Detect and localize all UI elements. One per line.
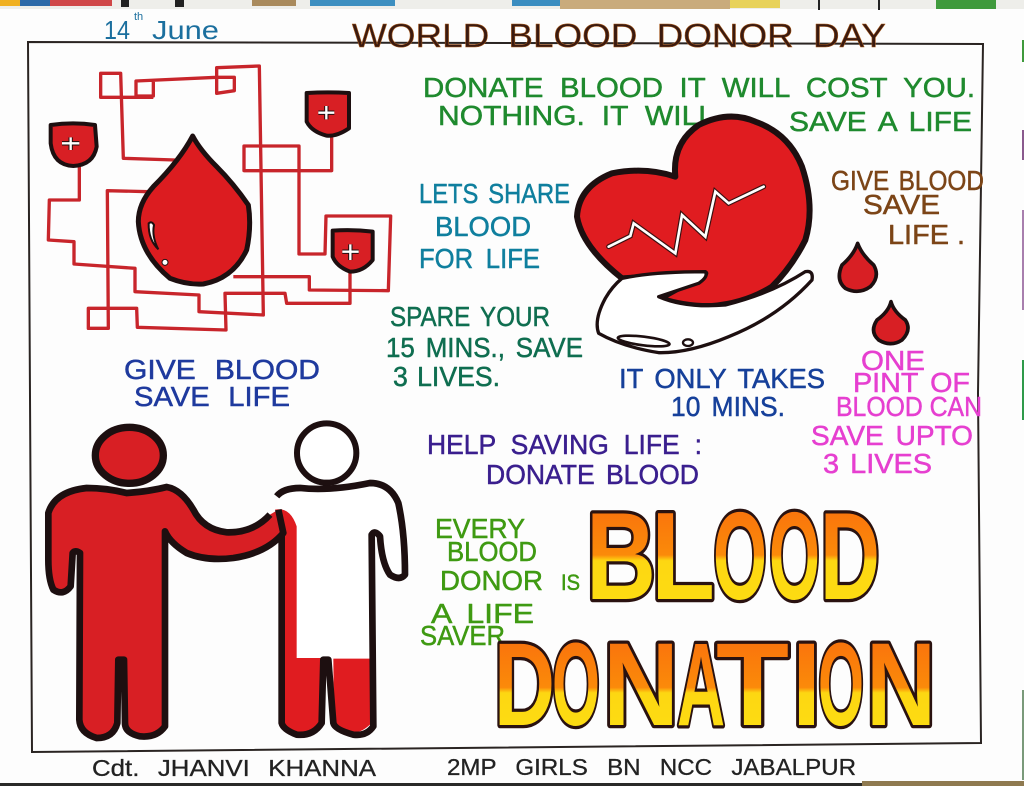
text: give blood save life (blue): SAVE LIFE	[134, 381, 290, 412]
text: donate blood slogan: NOTHING. IT WILL	[438, 100, 715, 131]
text: one pint of blood: PINT OF	[853, 367, 970, 398]
text: every blood donor is a life saver	[420, 513, 580, 651]
text: give blood save life (brown): LIFE .	[888, 219, 965, 250]
icon: blood bag lower right	[333, 230, 373, 272]
red tubes	[48, 66, 391, 330]
big heading: BLOOD: B	[586, 488, 656, 626]
text: every blood donor is a life saver: A LIFE	[431, 598, 534, 629]
title: WORLD BLOOD DONOR DAY	[352, 17, 886, 54]
big heading: DONATION: O	[552, 619, 600, 751]
text: spare your 15 mins: SPARE YOUR	[390, 301, 550, 332]
text: lets share blood for life: BLOOD	[435, 211, 531, 242]
text: every blood donor is a life saver: DONOR	[440, 565, 543, 596]
credits	[92, 754, 856, 781]
credits: 2MP GIRLS BN NCC JABALPUR	[447, 754, 856, 780]
icon: heart	[577, 117, 810, 306]
text: give blood save life (brown)	[831, 165, 984, 250]
text: one pint of blood: BLOOD CAN	[836, 391, 982, 422]
date: 14th June	[104, 11, 219, 45]
text: it only takes 10 mins	[619, 363, 825, 422]
big heading: BLOOD: D	[820, 488, 880, 626]
icon: blood bag left	[51, 123, 97, 166]
text: give blood save life (blue): GIVE BLOOD	[124, 354, 320, 385]
date: 14th June: th	[134, 11, 143, 23]
icon: heartbeat line	[609, 187, 764, 253]
big heading: DONATION: O	[818, 619, 864, 751]
recipient figure	[275, 423, 405, 735]
icon: small drop upper	[839, 243, 876, 291]
figures: donor and recipient	[48, 423, 405, 738]
text: help saving life: DONATE BLOOD	[486, 459, 699, 490]
big heading: DONATION: A	[677, 619, 725, 751]
big heading: DONATION	[494, 619, 936, 751]
big heading: DONATION: I	[792, 619, 821, 751]
text: donate blood slogan	[423, 72, 975, 137]
text: give blood save life (blue)	[124, 354, 320, 412]
icon: hand	[597, 271, 812, 353]
big heading: BLOOD	[586, 488, 880, 626]
text: give blood save life (brown): GIVE BLOOD	[831, 165, 984, 196]
text: every blood donor is a life saver: BLOOD	[447, 536, 537, 567]
date: 14th June: 14	[104, 15, 130, 45]
donor figure	[48, 427, 283, 738]
heart in hand illustration	[577, 117, 908, 353]
text: every blood donor is a life saver: SAVER	[420, 620, 505, 651]
text: spare your 15 mins: 15 MINS., SAVE	[386, 332, 583, 363]
text: spare your 15 mins	[386, 301, 583, 392]
big heading: DONATION: N	[866, 619, 936, 751]
text: help saving life	[427, 429, 702, 490]
text: one pint of blood: 3 LIVES	[823, 448, 932, 479]
text: one pint of blood: SAVE UPTO	[811, 420, 973, 451]
text: every blood donor is a life saver: EVERY	[435, 513, 525, 544]
text: lets share blood for life: LETS SHARE	[419, 178, 570, 209]
icon: blood bag top right	[307, 92, 349, 136]
text: donate blood slogan: DONATE BLOOD IT WILL COST YOU.	[423, 72, 975, 103]
text: it only takes 10 mins: 10 MINS.	[671, 391, 785, 422]
circuit illustration with central drop and blood bags	[48, 66, 391, 330]
credits: Cdt. JHANVI KHANNA	[92, 755, 377, 781]
text: lets share blood for life: FOR LIFE	[419, 243, 540, 274]
text: spare your 15 mins: 3 LIVES.	[393, 361, 500, 392]
text: help saving life: HELP SAVING LIFE :	[427, 429, 702, 460]
date: 14th June: June	[152, 15, 219, 45]
big heading: BLOOD: L	[651, 488, 715, 626]
big heading: DONATION: N	[603, 619, 679, 751]
big heading: BLOOD: O	[713, 488, 767, 626]
big heading: BLOOD: O	[769, 488, 820, 626]
icon: central blood drop	[138, 136, 250, 284]
text: donate blood slogan: SAVE A LIFE	[789, 106, 972, 137]
big heading: DONATION: D	[494, 619, 555, 751]
big heading: DONATION: T	[716, 619, 789, 751]
text: one pint of blood	[811, 345, 982, 479]
text: one pint of blood: ONE	[861, 345, 925, 376]
icon: small drop lower	[874, 302, 908, 344]
text: it only takes 10 mins: IT ONLY TAKES	[619, 363, 825, 394]
text: every blood donor is a life saver: IS	[561, 570, 580, 595]
text: lets share blood for life	[419, 178, 570, 274]
text: give blood save life (brown): SAVE	[863, 189, 940, 220]
